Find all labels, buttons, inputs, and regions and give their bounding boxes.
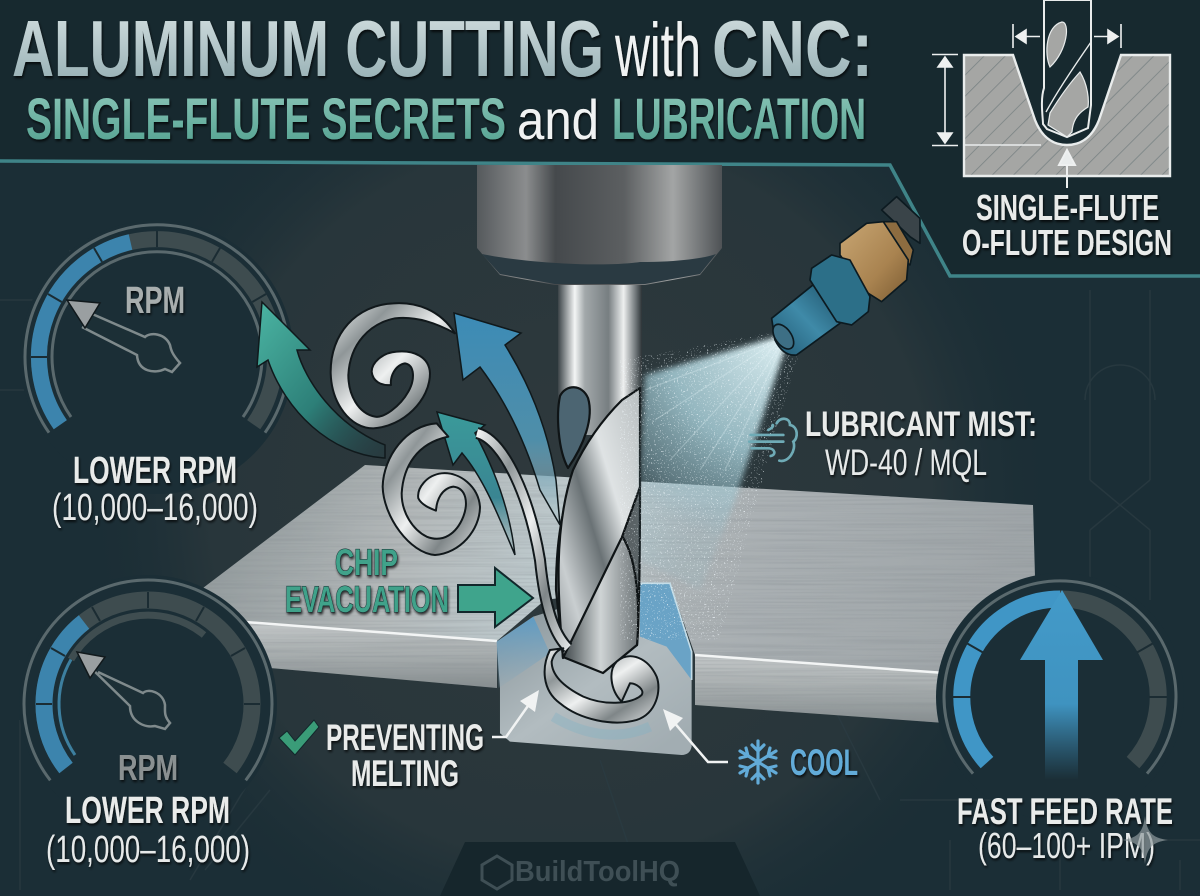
gauge: lower RPM <box>19 575 277 833</box>
metal chip: upper spiral <box>331 303 455 428</box>
needle <box>77 652 170 729</box>
label: chip evacuation <box>285 542 449 620</box>
single-flute label <box>962 187 1172 263</box>
lower land <box>563 536 638 673</box>
drill flutes <box>556 387 640 673</box>
blue tube <box>772 283 840 355</box>
blue hex nut <box>810 255 870 325</box>
plate top face <box>203 465 1035 673</box>
spindle housing <box>477 165 722 285</box>
label: lower rpm lower gauge: LOWER RPM <box>65 790 230 832</box>
icon: snowflake <box>740 741 776 783</box>
label: lower rpm upper gauge <box>52 450 258 529</box>
title line 1: ALUMINUM CUTTING <box>12 4 604 93</box>
main helical land <box>559 388 640 658</box>
plate front faces <box>245 622 497 688</box>
drill bit outline <box>1042 0 1091 137</box>
title line 1: with <box>614 8 701 93</box>
icon: sparkle <box>1122 816 1168 864</box>
arrow: blue chip flow <box>454 313 560 525</box>
header band <box>0 0 1200 276</box>
chip ribbon rising from the cut <box>477 433 568 648</box>
title line 2: SINGLE-FLUTE SECRETS <box>26 87 506 152</box>
drill shank <box>558 285 642 435</box>
title <box>12 4 873 152</box>
pocket floor and walls <box>497 583 692 755</box>
dimension arrows <box>932 24 1121 146</box>
label: lower rpm upper gauge: (10,000–16,000) <box>52 487 258 529</box>
arrow: cool pointer <box>663 709 728 762</box>
coolant on floor <box>553 717 650 735</box>
gauge: feed rate <box>936 573 1184 821</box>
label: preventing melting <box>326 717 484 794</box>
icon: mist <box>749 419 797 461</box>
brass hex nut <box>840 222 908 302</box>
watermark <box>440 842 760 896</box>
arrow: preventing melting pointer <box>492 690 539 737</box>
metal chip: in the pocket <box>545 648 658 723</box>
arrow: teal chip flow left <box>257 302 385 458</box>
label: lubricant mist: LUBRICANT MIST: <box>805 405 1037 444</box>
workpiece cross-section <box>964 55 1170 176</box>
gauge label: RPM lower: RPM <box>118 747 178 788</box>
pocket cut <box>497 583 692 755</box>
label: chip evacuation: CHIP <box>335 542 398 583</box>
watermark logo <box>482 856 512 889</box>
title line 1: CNC: <box>712 4 873 93</box>
label: lubricant mist: WD-40 / MQL <box>825 442 987 483</box>
arrow: chip evacuation <box>458 568 533 627</box>
aluminum plate <box>203 465 1035 723</box>
upper flute <box>558 387 590 468</box>
arrow: teal chip flow small <box>437 412 515 555</box>
nozzle <box>769 197 920 355</box>
blue left wall <box>497 617 550 688</box>
title line 2: and <box>517 88 599 151</box>
lubricant spray <box>620 330 800 640</box>
label: preventing melting: PREVENTING <box>326 717 484 758</box>
label: lower rpm upper gauge: LOWER RPM <box>73 450 237 492</box>
label: preventing melting: MELTING <box>351 753 459 794</box>
hose <box>882 197 920 243</box>
label: chip evacuation: EVACUATION <box>285 579 449 620</box>
label: lower rpm lower gauge <box>46 790 250 871</box>
single-flute diagram <box>932 0 1170 188</box>
blue right wall <box>640 583 692 680</box>
gauge: upper RPM <box>20 220 294 494</box>
watermark text: BuildToolHQ <box>515 856 680 888</box>
label: cool: COOL <box>790 742 858 783</box>
brass collar <box>883 222 913 265</box>
nozzle opening <box>769 321 798 353</box>
label: lower rpm lower gauge: (10,000–16,000) <box>46 829 250 871</box>
metal chip: lower spiral <box>383 423 480 555</box>
label: fast feed rate <box>957 791 1173 866</box>
central glow behind the tool <box>90 20 1050 896</box>
needle <box>67 300 180 372</box>
icon: check mark <box>279 720 319 755</box>
pointer arrow <box>1059 150 1075 188</box>
feed arrow <box>1020 590 1103 780</box>
label: lubricant mist <box>805 405 1037 483</box>
title line 2: LUBRICATION <box>612 87 866 152</box>
gauge label: RPM upper: RPM <box>125 280 185 322</box>
